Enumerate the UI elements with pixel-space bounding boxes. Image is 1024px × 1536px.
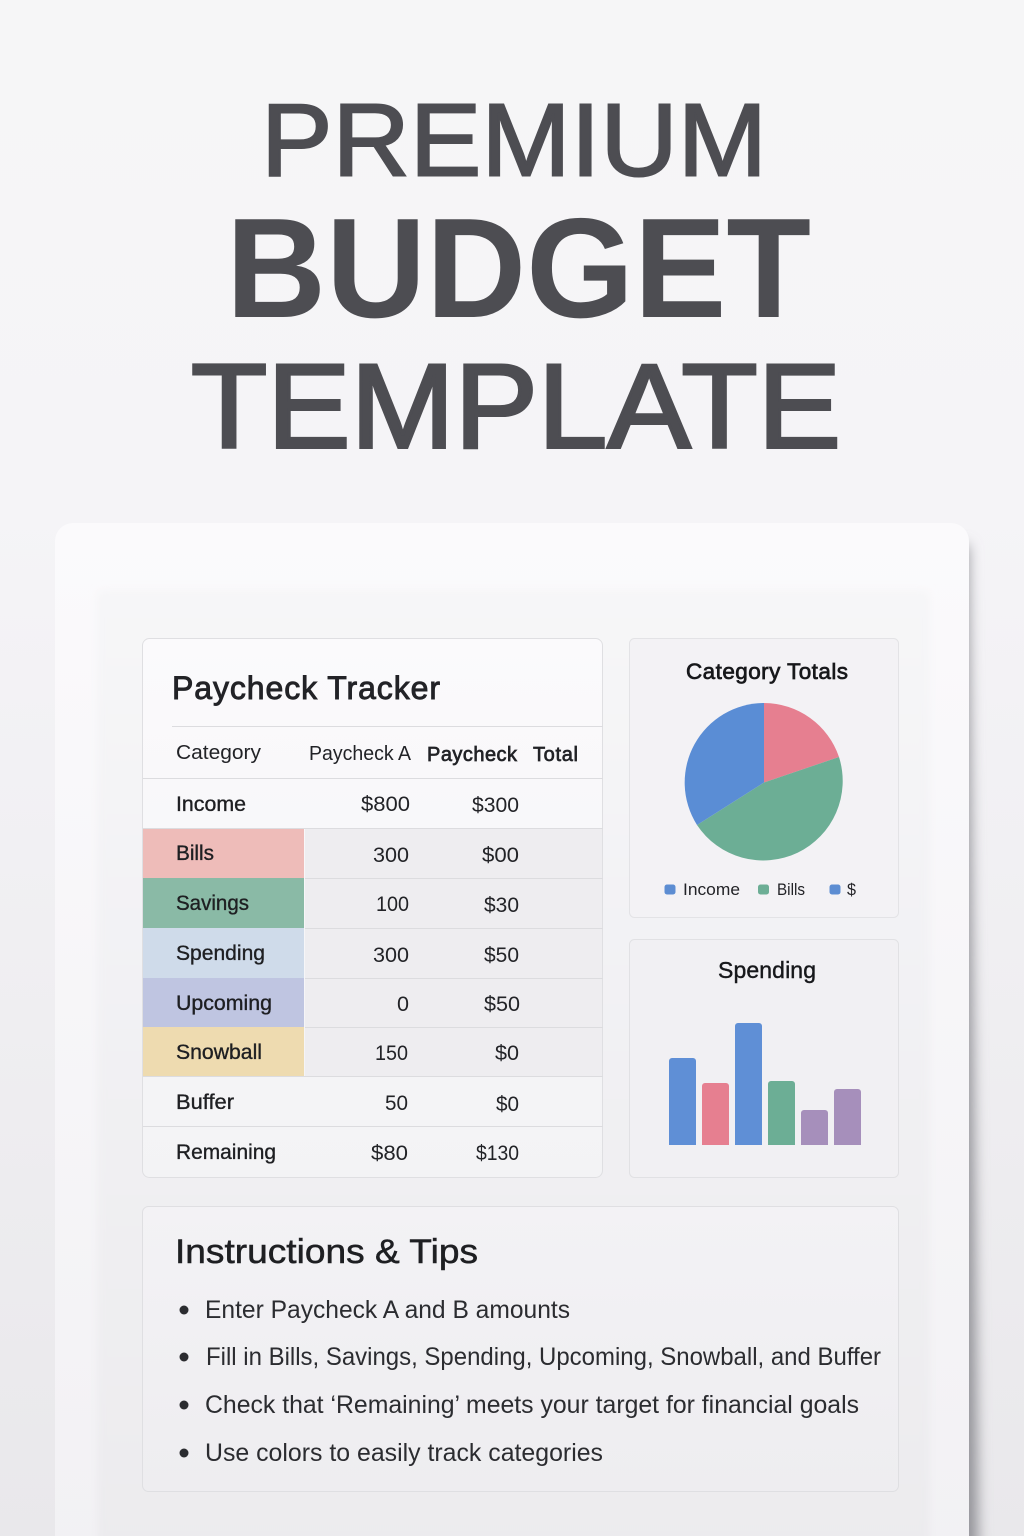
pie legend <box>664 880 857 899</box>
table values: paycheck B: $00 <box>482 844 519 867</box>
panel: category totals <box>630 638 898 918</box>
table values: paycheck B: $300 <box>472 794 519 817</box>
table values: paycheck A: 300 <box>373 944 409 967</box>
row shading: value columns <box>305 829 602 1076</box>
heading: instructions and tips: Instructions & Tips <box>175 1233 478 1271</box>
pie chart <box>685 703 843 860</box>
table category labels: Savings <box>176 892 249 915</box>
table category labels: Spending <box>176 942 265 965</box>
pie legend: Bills <box>777 880 805 899</box>
tip 1: Enter Paycheck A and B amounts <box>205 1296 570 1324</box>
tip 4: Use colors to easily track categories <box>205 1439 603 1467</box>
heading: paycheck tracker: Paycheck Tracker <box>172 670 440 706</box>
table header: Paycheck A <box>309 743 412 765</box>
table values: paycheck B: $30 <box>484 894 519 917</box>
title: BUDGET <box>226 189 811 348</box>
bar chart <box>669 1023 861 1145</box>
table values: paycheck A: 150 <box>375 1042 408 1065</box>
table values: paycheck B <box>472 794 520 1165</box>
panel: instructions and tips <box>142 1206 898 1492</box>
title: TEMPLATE <box>191 340 841 474</box>
table category labels: Upcoming <box>176 992 272 1015</box>
table values: paycheck A: $800 <box>361 793 410 816</box>
table values: paycheck B: $0 <box>496 1093 519 1116</box>
table header: Category <box>176 742 261 764</box>
table category labels: Snowball <box>176 1041 262 1064</box>
heading: spending: Spending <box>718 957 816 983</box>
panel: paycheck tracker <box>142 638 603 1178</box>
table values: paycheck B: $50 <box>484 993 520 1016</box>
pie legend: Income <box>683 880 740 899</box>
heading: category totals: Category Totals <box>686 659 848 684</box>
table values: paycheck B: $50 <box>484 944 519 967</box>
title: PREMIUM <box>261 82 767 198</box>
table values: paycheck B: $0 <box>495 1042 519 1065</box>
table category labels: Buffer <box>176 1091 234 1114</box>
table category labels <box>176 793 276 1164</box>
pie legend: $ <box>847 880 857 899</box>
table values: paycheck A: 300 <box>373 844 409 867</box>
table category labels: Bills <box>176 842 214 865</box>
table values: paycheck A <box>361 793 410 1165</box>
table values: paycheck A: 50 <box>385 1092 408 1115</box>
category colour cells <box>143 829 304 1076</box>
table values: paycheck A: $80 <box>371 1142 408 1165</box>
table header: Paycheck <box>427 744 518 766</box>
title <box>191 82 841 474</box>
panel: spending <box>630 940 898 1178</box>
tip 3: Check that ‘Remaining’ meets your target for financial goals <box>205 1391 859 1419</box>
tip 2: Fill in Bills, Savings, Spending, Upcoming, Snowball, and Buffer <box>206 1343 881 1371</box>
table values: paycheck A: 100 <box>376 893 409 916</box>
table category labels: Remaining <box>176 1141 276 1164</box>
table values: paycheck B: $130 <box>476 1142 519 1165</box>
table header <box>176 742 578 766</box>
table category labels: Income <box>176 793 246 816</box>
main card <box>55 523 978 1536</box>
table values: paycheck A: 0 <box>397 993 409 1016</box>
table header: Total <box>533 744 578 766</box>
